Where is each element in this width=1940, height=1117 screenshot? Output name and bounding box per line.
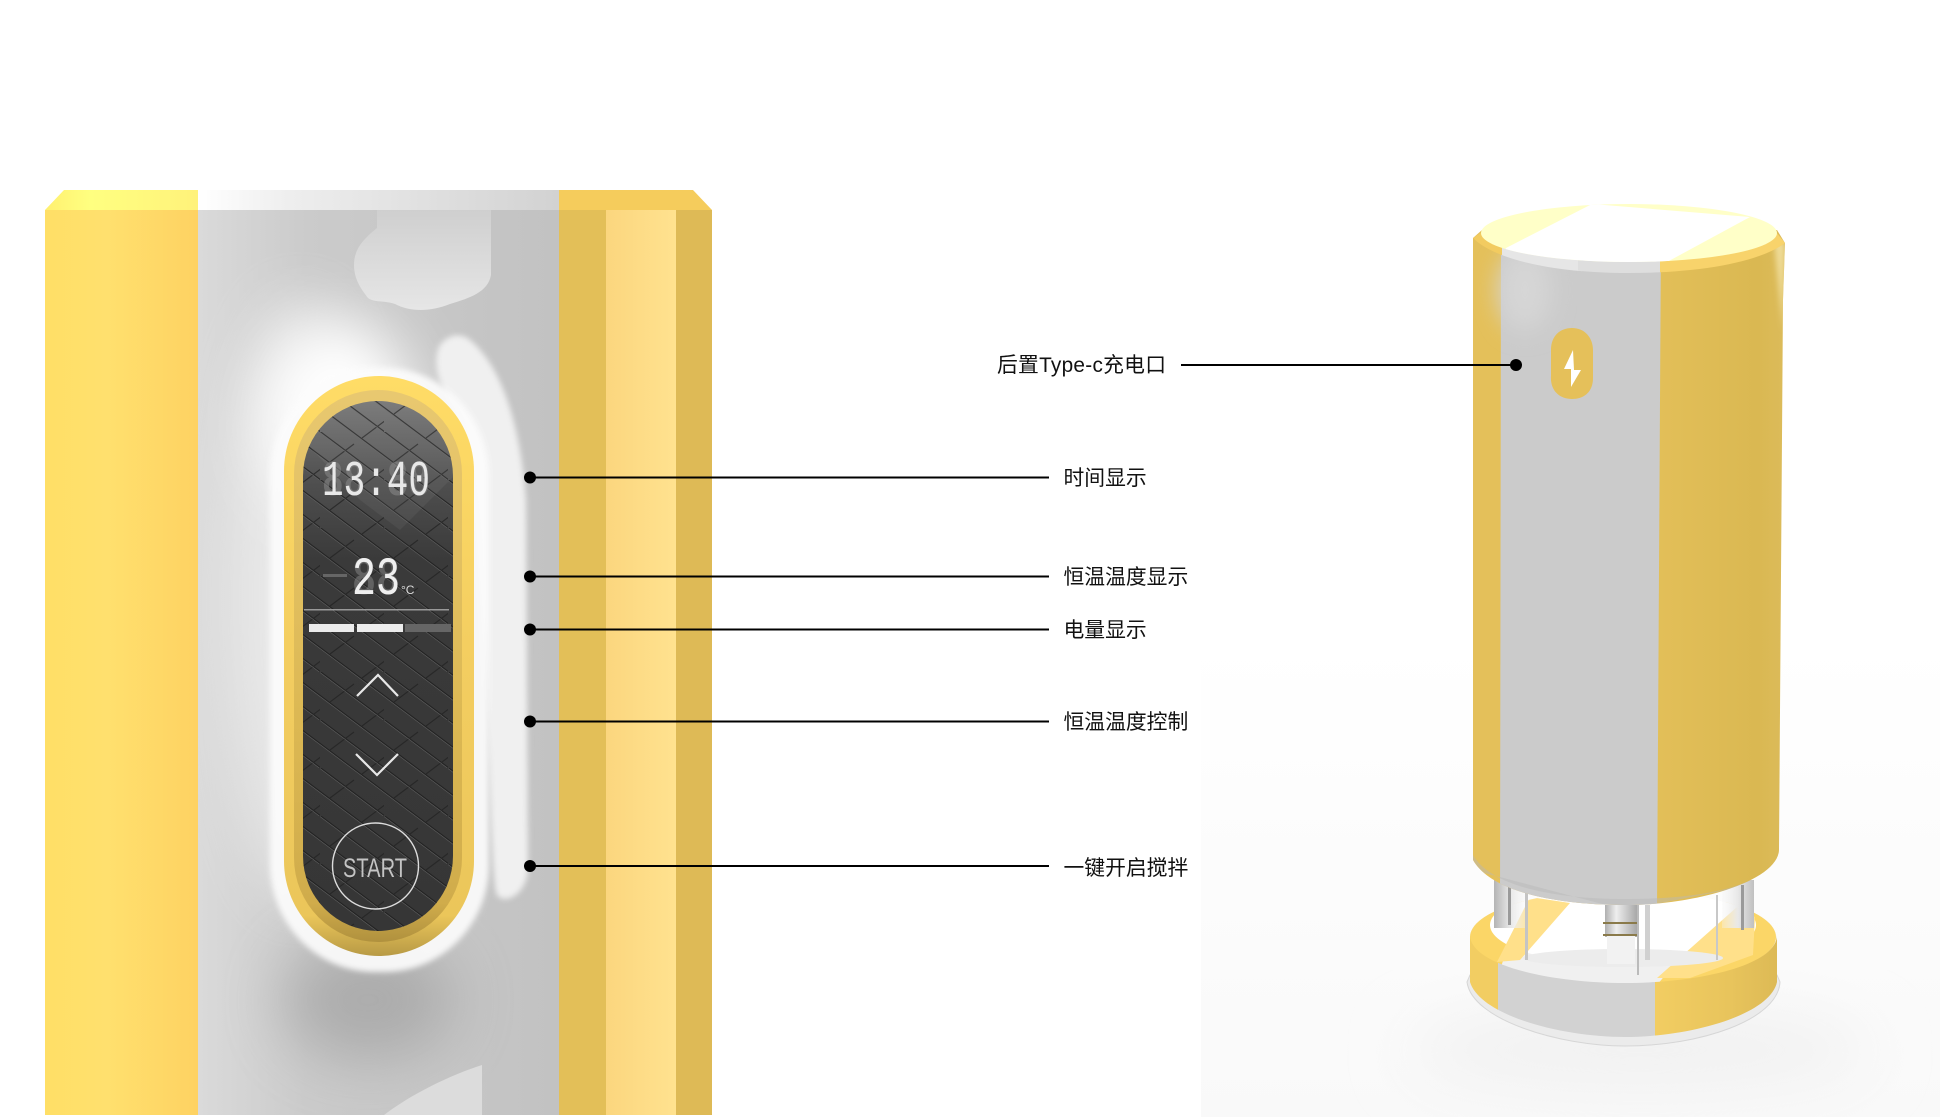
dark touch screen	[303, 401, 460, 931]
callout line: Type-c port	[1181, 359, 1522, 371]
panel: close-up of control panel body	[45, 190, 712, 1115]
label: 电量显示: 电量显示	[1064, 619, 1147, 642]
control pill	[270, 368, 489, 972]
label: 恒温温度控制: 恒温温度控制	[1064, 711, 1188, 734]
time display: 88:88	[322, 454, 430, 511]
time display: 13:40	[322, 454, 430, 511]
yellow ring	[284, 376, 474, 956]
battery level bars	[309, 624, 451, 632]
left yellow band	[45, 190, 198, 1115]
divider	[304, 609, 449, 610]
annotation lines and dots	[524, 472, 1049, 872]
time display	[324, 461, 428, 496]
start button	[332, 823, 418, 909]
icon: down arrow	[356, 754, 398, 775]
white bezel	[270, 368, 489, 972]
label: 时间显示: 时间显示	[1064, 467, 1147, 490]
label: 一键开启搅拌: 一键开启搅拌	[1064, 857, 1188, 880]
temperature display: °C	[401, 583, 415, 597]
cylinder rim	[1473, 233, 1785, 273]
base lip	[1467, 975, 1780, 1046]
callout line: temperature control	[524, 716, 1049, 728]
transparent columns and shaft	[1494, 880, 1754, 975]
label: 恒温温度显示: 恒温温度显示	[1064, 566, 1188, 589]
callout line: temperature display	[524, 570, 1049, 582]
temperature display: 23	[352, 550, 400, 611]
base wall	[1470, 930, 1780, 1040]
cylinder top face	[1481, 204, 1777, 262]
floor shadow backdrop	[1201, 640, 1940, 1117]
callout line: time	[524, 472, 1049, 484]
inner ring	[294, 390, 462, 942]
callout line: start	[524, 860, 1049, 872]
start button: START	[343, 853, 407, 883]
infographic canvas	[45, 190, 1862, 1115]
temperature display: 88	[352, 550, 400, 611]
temperature display	[323, 558, 414, 594]
right yellow band	[559, 190, 712, 1115]
callout line: battery	[524, 624, 1049, 636]
cylinder body	[1470, 200, 1790, 910]
icon: lightning bolt	[1564, 350, 1581, 387]
icon: up arrow	[357, 675, 398, 696]
icon: charging port badge	[1551, 328, 1593, 399]
centre grey band with soft reflections	[198, 190, 559, 1115]
base top surface	[1470, 898, 1776, 982]
label: 后置Type-c充电口: 后置Type-c充电口	[997, 354, 1166, 377]
panel: full product view	[1467, 200, 1790, 1046]
